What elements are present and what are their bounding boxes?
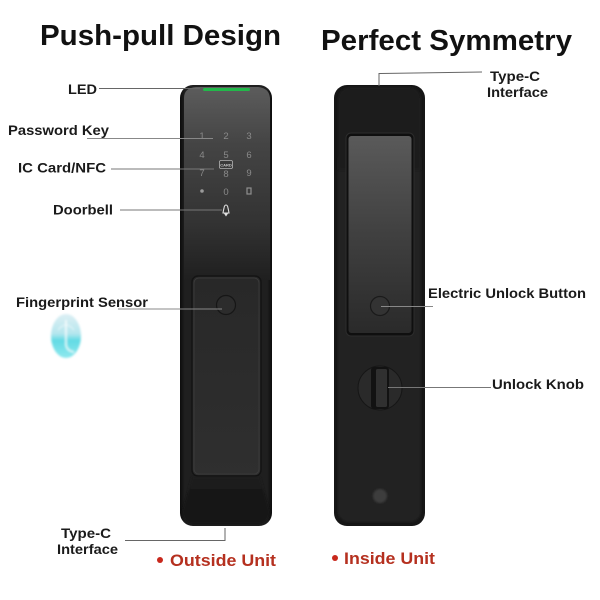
caption: Inside Unit: Inside Unit bbox=[344, 549, 435, 568]
card reader icon: CARD bbox=[220, 162, 232, 168]
battery cover bbox=[346, 133, 414, 336]
number keypad: 1 bbox=[199, 131, 205, 142]
number keypad: 0 bbox=[223, 187, 229, 198]
label: Unlock Knob: Unlock Knob bbox=[492, 376, 584, 392]
label: inside Type-C Interface: Interface bbox=[487, 84, 548, 100]
inside lock unit bbox=[334, 85, 425, 526]
icon: doorbell bbox=[223, 205, 229, 216]
label: inside Type-C Interface bbox=[379, 68, 548, 100]
label: Electric Unlock Button: Electric Unlock Button bbox=[428, 285, 586, 301]
fingerprint panel bbox=[192, 276, 261, 476]
label: outside Type-C Interface bbox=[57, 525, 225, 557]
number keypad: 3 bbox=[246, 131, 252, 142]
keypad face bbox=[184, 87, 270, 280]
number keypad bbox=[199, 131, 252, 198]
number keypad: 6 bbox=[246, 150, 252, 161]
number keypad: 2 bbox=[223, 131, 229, 142]
number keypad: 9 bbox=[246, 168, 252, 179]
label: inside Type-C Interface: Type-C bbox=[490, 68, 540, 84]
label: outside Type-C Interface: Interface bbox=[57, 541, 118, 557]
number keypad: 4 bbox=[199, 150, 205, 161]
icon: fingerprint bbox=[51, 314, 81, 358]
unlock knob bbox=[358, 366, 402, 410]
LED indicator strip bbox=[203, 88, 250, 91]
label: Doorbell: Doorbell bbox=[53, 202, 113, 218]
label: Fingerprint Sensor: Fingerprint Sensor bbox=[16, 294, 149, 310]
screw bbox=[373, 489, 387, 503]
outside lock unit bbox=[180, 85, 272, 526]
outside unit body bbox=[180, 85, 272, 526]
label: IC Card/NFC: IC Card/NFC bbox=[18, 160, 106, 176]
title: Perfect Symmetry: Perfect Symmetry bbox=[321, 25, 572, 57]
label: outside Type-C Interface: Type-C bbox=[61, 525, 111, 541]
label: LED: LED bbox=[68, 81, 97, 97]
fingerprint sensor bbox=[216, 296, 236, 314]
label: LED bbox=[68, 81, 200, 97]
title: Push-pull Design: Push-pull Design bbox=[40, 20, 281, 52]
caption: Outside Unit: Outside Unit bbox=[170, 551, 276, 570]
inside unit body bbox=[334, 85, 425, 526]
lower body shade bbox=[182, 477, 270, 524]
label: Password Key: Password Key bbox=[8, 122, 109, 138]
number keypad: 5 bbox=[223, 150, 229, 161]
number keypad: 8 bbox=[223, 169, 229, 180]
number keypad: 7 bbox=[199, 168, 205, 179]
electric unlock button bbox=[370, 296, 390, 316]
card reader icon bbox=[220, 160, 232, 168]
